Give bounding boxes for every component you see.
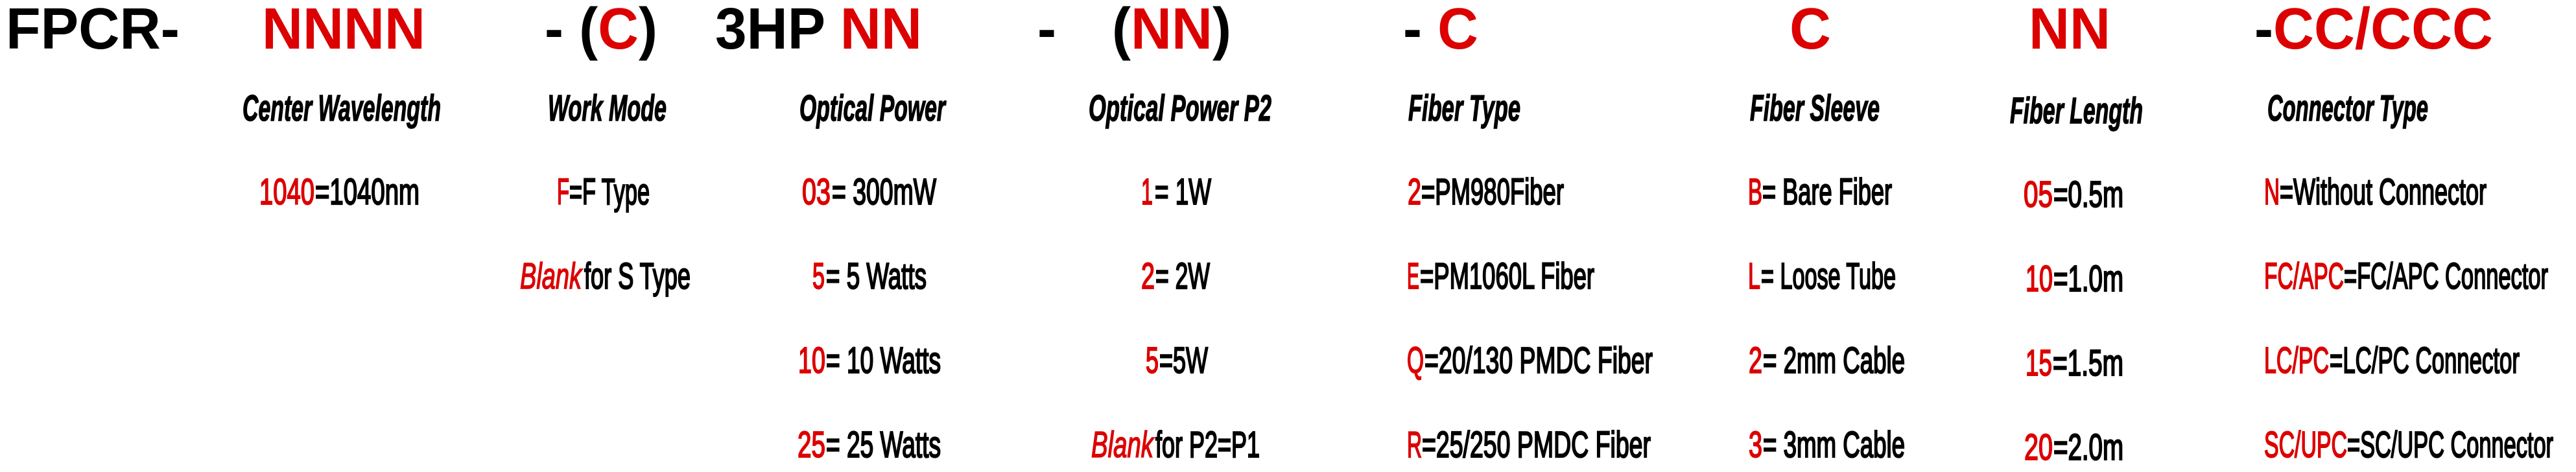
option: blank for P2=P1: for P2=P1 — [1155, 424, 1260, 466]
option: blank for S type — [520, 255, 691, 297]
option: 5 — [1146, 340, 1208, 381]
option: 10: 10 — [2026, 258, 2053, 300]
option: SC/UPC — [2264, 424, 2553, 466]
option: 20: 20 — [2024, 427, 2053, 468]
option: 05: 05 — [2024, 174, 2053, 215]
heading: fiber length: Fiber Length — [2010, 90, 2143, 132]
option: Q: Q — [1407, 340, 1424, 381]
option: 2: 2 — [1749, 340, 1762, 381]
option: E: =PM1060L Fiber — [1420, 255, 1594, 297]
column: work mode — [520, 0, 691, 297]
option: 5: 5 — [1146, 340, 1159, 381]
option: 20: =2.0m — [2053, 427, 2123, 468]
column: fiber type — [1403, 0, 1653, 466]
option: 2: = 2W — [1155, 255, 1210, 297]
option: 3: = 3mm Cable — [1763, 424, 1905, 466]
heading: work mode: Work Mode — [548, 88, 667, 129]
option: 10: = 10 Watts — [826, 340, 941, 381]
option: 2: 2 — [1408, 171, 1421, 213]
heading: optical power: Optical Power — [799, 88, 947, 129]
option: 20 — [2024, 427, 2123, 468]
option: 03 — [802, 171, 936, 213]
heading: fiber type: Fiber Type — [1408, 88, 1520, 129]
option: blank for P2=P1: Blank — [1091, 424, 1155, 466]
option: 03: 03 — [802, 171, 831, 213]
option: FC/APC: FC/APC — [2264, 255, 2344, 297]
option: 1: = 1W — [1155, 171, 1211, 213]
option: 2 — [1141, 255, 1210, 297]
option: 10 — [2026, 258, 2123, 300]
heading: center wavelength: Center Wavelength — [242, 88, 441, 129]
option: 10: 10 — [798, 340, 825, 381]
option: E: E — [1407, 255, 1419, 297]
option: 10: =1.0m — [2053, 258, 2123, 300]
option: 05 — [2024, 174, 2123, 215]
option: B — [1748, 171, 1892, 213]
option: 03: = 300mW — [832, 171, 936, 213]
option: Q: =20/130 PMDC Fiber — [1424, 340, 1653, 381]
option: B: B — [1748, 171, 1762, 213]
option: 25: = 25 Watts — [826, 424, 941, 466]
column: center wavelength — [242, 0, 441, 213]
option: FC/APC — [2264, 255, 2548, 297]
option: E — [1407, 255, 1594, 297]
option: N: N — [2264, 171, 2280, 213]
option: 25 — [798, 424, 941, 466]
option: 1040 — [259, 171, 419, 213]
heading: connector type: Connector Type — [2267, 88, 2428, 129]
heading: fiber sleeve: Fiber Sleeve — [1750, 88, 1880, 129]
option: 2 — [1749, 340, 1905, 381]
option: 2 — [1408, 171, 1564, 213]
column: optical power P2 — [1089, 0, 1271, 466]
column: connector type — [2254, 0, 2553, 466]
option: L: L — [1748, 255, 1760, 297]
option: R — [1407, 424, 1651, 466]
column: fiber length — [2010, 0, 2143, 468]
heading: optical power P2: Optical Power P2 — [1089, 88, 1271, 129]
option: 5 — [812, 255, 927, 297]
option: L — [1748, 255, 1896, 297]
option: blank for P2=P1 — [1091, 424, 1260, 466]
option: 15 — [2026, 342, 2123, 384]
option: blank for S type: for S Type — [584, 255, 691, 297]
option: 2: = 2mm Cable — [1763, 340, 1905, 381]
option: 15: 15 — [2026, 342, 2052, 384]
option: LC/PC: LC/PC — [2264, 340, 2329, 381]
option: 05: =0.5m — [2053, 174, 2123, 215]
option: LC/PC — [2264, 340, 2520, 381]
option: 1040: 1040 — [259, 171, 314, 213]
option: 25: 25 — [798, 424, 825, 466]
option: SC/UPC: SC/UPC — [2264, 424, 2347, 466]
option: F type: F — [557, 171, 569, 213]
option: 2: =PM980Fiber — [1421, 171, 1564, 213]
column: fiber sleeve — [1748, 0, 1905, 466]
option: N — [2264, 171, 2487, 213]
option: 5: 5 — [812, 255, 825, 297]
option: B: = Bare Fiber — [1762, 171, 1892, 213]
option: F type — [557, 171, 650, 213]
option: F type: =F Type — [569, 171, 650, 213]
option: 1040: =1040nm — [315, 171, 419, 213]
option: 1: 1 — [1141, 171, 1153, 213]
option: 3 — [1749, 424, 1905, 466]
column: optical power — [715, 0, 947, 466]
option: L: = Loose Tube — [1761, 255, 1896, 297]
option: 5: = 5 Watts — [826, 255, 927, 297]
option: 3: 3 — [1749, 424, 1762, 466]
option: 10 — [798, 340, 941, 381]
option: 2: 2 — [1141, 255, 1155, 297]
option: Q — [1407, 340, 1653, 381]
option: R: =25/250 PMDC Fiber — [1422, 424, 1651, 466]
option: blank for S type: Blank — [520, 255, 583, 297]
option: R: R — [1407, 424, 1422, 466]
option: 15: =1.5m — [2053, 342, 2123, 384]
option: 1 — [1141, 171, 1211, 213]
option: 5: =5W — [1159, 340, 1208, 381]
